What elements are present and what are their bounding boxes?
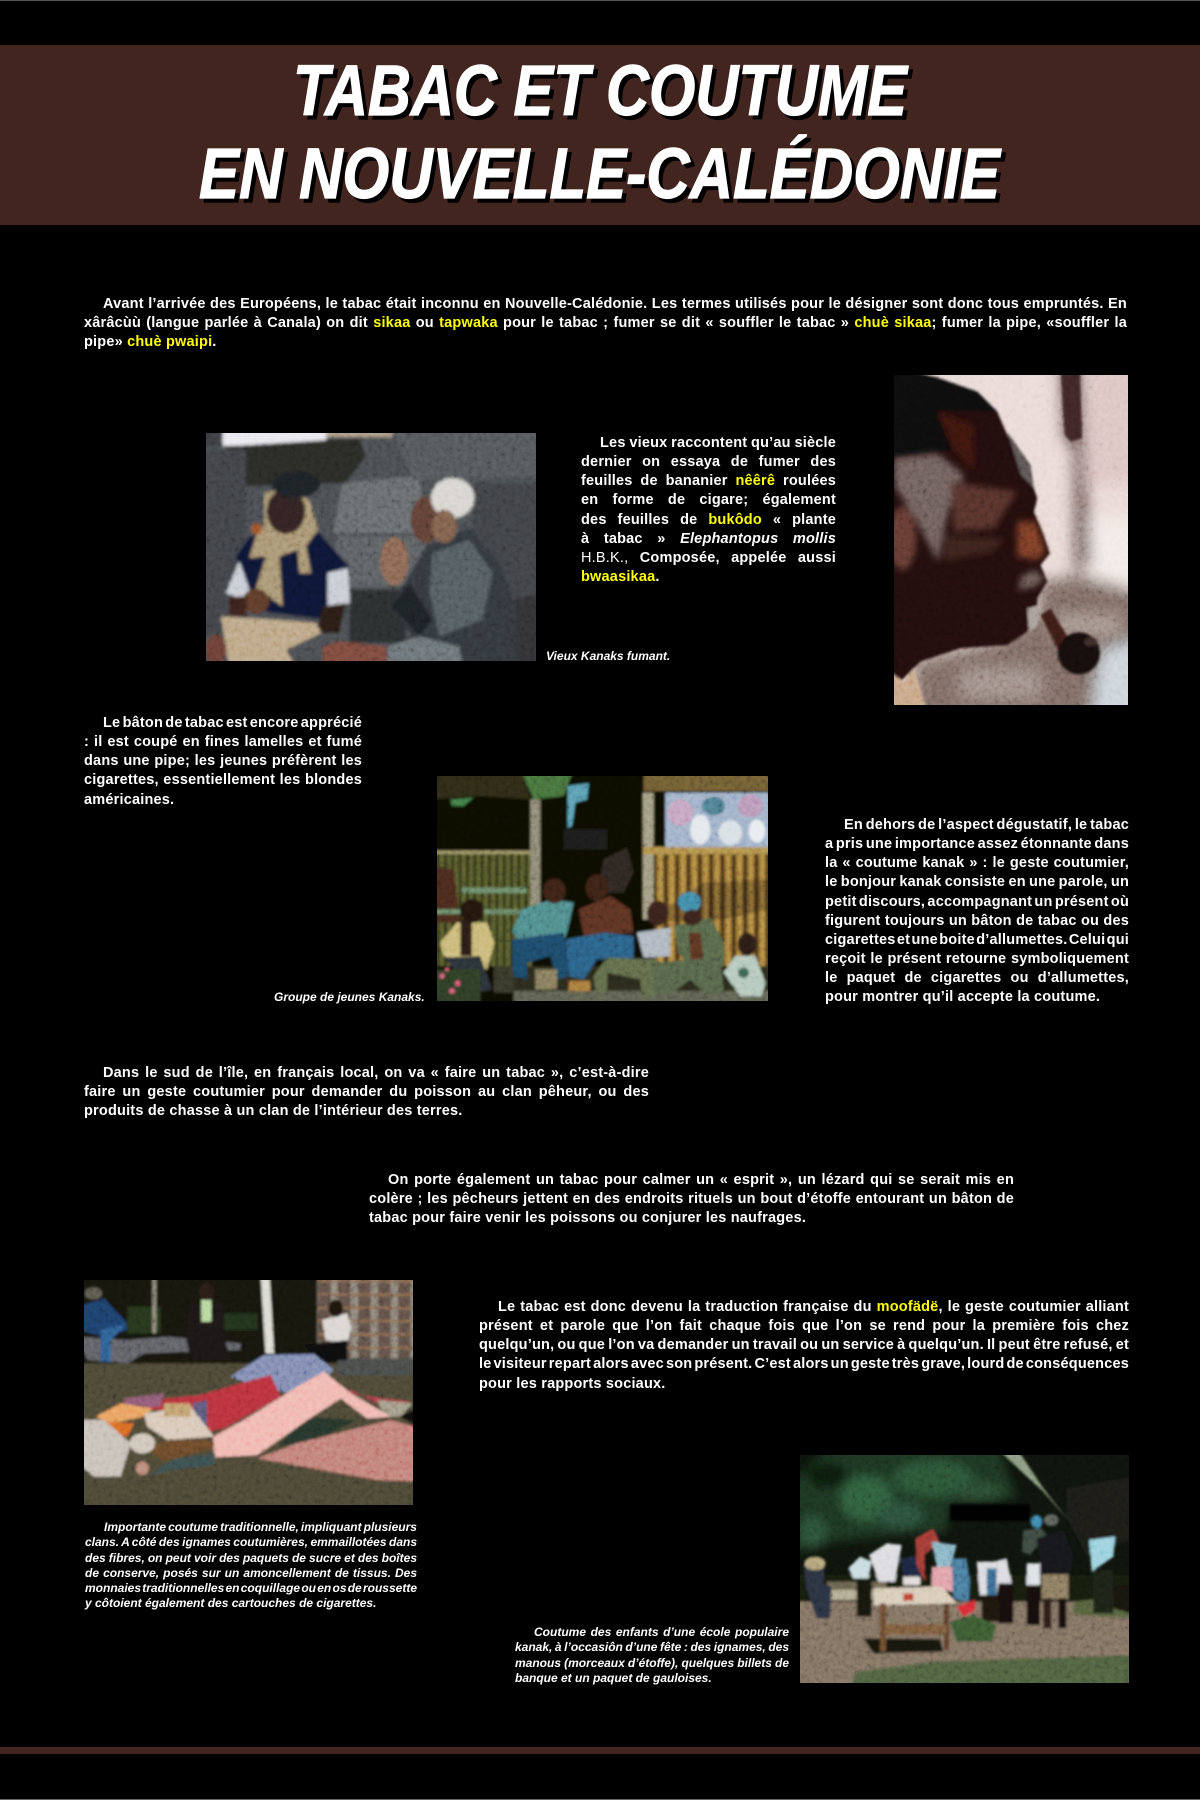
caption: coutume des enfants: Coutume des enfants d’une école populaire bbox=[534, 1625, 789, 1639]
text: on porte également un tabac bbox=[369, 1172, 1014, 1226]
text: en dehors de l'aspect dégustatif: a pris une importance assez étonnante dans bbox=[825, 836, 1129, 852]
caption: importante coutume traditionnelle bbox=[84, 1520, 417, 1610]
title: EN NOUVELLE-CALÉDONIE bbox=[199, 135, 1002, 214]
text: dans le sud de l'île: Dans le sud de l’île, en français local, on va « faire un tabac », c’est-à-dire bbox=[103, 1065, 649, 1081]
intro paragraph bbox=[84, 296, 1127, 350]
title bbox=[199, 52, 1002, 214]
photo: coutume des enfants bbox=[800, 1455, 1129, 1683]
text: en dehors de l'aspect dégustatif: petit discours, accompagnant un présent où bbox=[825, 894, 1129, 910]
text: dans le sud de l'île: produits de chasse à un clan de l’intérieur des terres. bbox=[84, 1103, 462, 1119]
text: on porte également un tabac: colère ; les pêcheurs jettent en des endroits rituels un bout d’étoffe entourant un bâton de bbox=[369, 1191, 1014, 1207]
text: en dehors de l'aspect dégustatif: pour montrer qu’il accepte la coutume. bbox=[825, 989, 1100, 1005]
caption: importante coutume traditionnelle: des fibres, on peut voir des paquets de sucre et des boîtes bbox=[85, 1551, 417, 1565]
text: en dehors de l'aspect dégustatif: le paquet de cigarettes ou d’allumettes, bbox=[825, 970, 1129, 986]
text: le bâton de tabac: Le bâton de tabac est encore apprécié bbox=[103, 715, 362, 731]
text: en dehors de l'aspect dégustatif: figurent toujours un bâton de tabac ou des bbox=[825, 913, 1129, 929]
text: le bâton de tabac: cigarettes, essentiellement les blondes bbox=[84, 772, 362, 788]
text: le tabac est donc devenu: présent et parole que l’on fait chaque fois que l’on se rend pour la première fois chez bbox=[479, 1318, 1129, 1334]
caption: vieux kanaks fumant: Vieux Kanaks fumant. bbox=[546, 649, 670, 663]
text: en dehors de l'aspect dégustatif bbox=[825, 817, 1129, 1005]
title banner bbox=[0, 45, 1200, 225]
text: on porte également un tabac: tabac pour faire venir les poissons ou conjurer les naufrages. bbox=[369, 1210, 806, 1226]
photo: homme à la pipe bbox=[894, 375, 1128, 705]
text: les vieux raccontent: feuilles de bananier nêêrê roulées bbox=[581, 473, 836, 489]
caption: importante coutume traditionnelle: de conserve, posés sur un amoncellement de tissus. Des bbox=[85, 1566, 417, 1580]
text: les vieux raccontent: Les vieux raccontent qu’au siècle bbox=[600, 435, 836, 451]
text: le bâton de tabac: dans une pipe; les jeunes préfèrent les bbox=[84, 753, 362, 769]
text: les vieux raccontent bbox=[581, 435, 836, 585]
text: les vieux raccontent: en forme de cigare; également bbox=[581, 492, 836, 508]
caption: importante coutume traditionnelle: Importante coutume traditionnelle, impliquant plusieurs bbox=[104, 1520, 417, 1534]
intro paragraph: Avant l’arrivée des Européens, le tabac était inconnu en Nouvelle-Calédonie. Les termes utilisés pour le désigner sont donc tous empruntés. En bbox=[103, 296, 1127, 312]
photo: importante coutume traditionnelle bbox=[84, 1280, 413, 1505]
caption: importante coutume traditionnelle: monnaies traditionnelles en coquillage ou en os de roussette bbox=[85, 1581, 417, 1595]
text: les vieux raccontent: bwaasikaa. bbox=[581, 569, 660, 585]
text: le tabac est donc devenu: quelqu’un, ou que l’on va demander un travail ou un service à quelqu’un. Il peut être refusé, et bbox=[479, 1337, 1129, 1353]
text: le bâton de tabac: américaines. bbox=[84, 792, 174, 808]
title: TABAC ET COUTUME bbox=[293, 52, 909, 131]
photo: vieux kanaks fumant bbox=[206, 433, 536, 661]
text: les vieux raccontent: à tabac » Elephantopus mollis bbox=[581, 531, 836, 547]
caption: coutume des enfants: banque et un paquet de gauloises. bbox=[515, 1671, 712, 1685]
text: en dehors de l'aspect dégustatif: le bonjour kanak consiste en une parole, un bbox=[825, 874, 1129, 890]
caption: importante coutume traditionnelle: clans. A côté des ignames coutumières, emmaillotées dans bbox=[85, 1535, 417, 1549]
text: les vieux raccontent: H.B.K., Composée, appelée aussi bbox=[581, 550, 836, 566]
text: dans le sud de l'île: faire un geste coutumier pour demander du poisson au clan pêheur, ou des bbox=[84, 1084, 649, 1100]
text: en dehors de l'aspect dégustatif: En dehors de l’aspect dégustatif, le tabac bbox=[844, 817, 1129, 833]
text: les vieux raccontent: des feuilles de bukôdo « plante bbox=[581, 512, 836, 528]
caption: importante coutume traditionnelle: y côtoient également des cartouches de cigarettes. bbox=[85, 1596, 376, 1610]
text: dans le sud de l'île bbox=[84, 1065, 649, 1119]
text: le tabac est donc devenu bbox=[479, 1299, 1129, 1392]
intro paragraph: xârâcùù (langue parlée à Canala) on dit sikaa ou tapwaka pour le tabac ; fumer se dit « souffler le tabac » chuè sikaa; fumer la pipe, «souffler la bbox=[84, 315, 1127, 331]
text: le bâton de tabac bbox=[84, 715, 362, 808]
text: le bâton de tabac: : il est coupé en fines lamelles et fumé bbox=[84, 734, 362, 750]
text: en dehors de l'aspect dégustatif: cigarettes et une boite d’allumettes. Celui qui bbox=[825, 932, 1129, 948]
text: le tabac est donc devenu: pour les rapports sociaux. bbox=[479, 1376, 666, 1392]
caption: coutume des enfants bbox=[515, 1625, 789, 1685]
text: le tabac est donc devenu: Le tabac est donc devenu la traduction française du moofädë, le geste coutumier alliant bbox=[498, 1299, 1129, 1315]
caption: coutume des enfants: manous (morceaux d’étoffe), quelques billets de bbox=[515, 1656, 789, 1670]
footer bar bbox=[0, 1747, 1200, 1754]
text: le tabac est donc devenu: le visiteur repart alors avec son présent. C’est alors un geste très grave, lourd de conséquences bbox=[479, 1356, 1129, 1372]
text: en dehors de l'aspect dégustatif: la « coutume kanak » : le geste coutumier, bbox=[825, 855, 1129, 871]
intro paragraph: pipe» chuè pwaipi. bbox=[84, 334, 217, 350]
text: on porte également un tabac: On porte également un tabac pour calmer un « esprit », un lézard qui se serait mis en bbox=[388, 1172, 1014, 1188]
text: les vieux raccontent: dernier on essaya de fumer des bbox=[581, 454, 836, 470]
caption: coutume des enfants: kanak, à l’occasiôn d’une fête : des ignames, des bbox=[515, 1640, 789, 1654]
caption: groupe de jeunes kanaks: Groupe de jeunes Kanaks. bbox=[274, 990, 425, 1004]
text: en dehors de l'aspect dégustatif: reçoit le présent retourne symboliquement bbox=[825, 951, 1129, 967]
photo: groupe de jeunes kanaks bbox=[437, 776, 768, 1001]
